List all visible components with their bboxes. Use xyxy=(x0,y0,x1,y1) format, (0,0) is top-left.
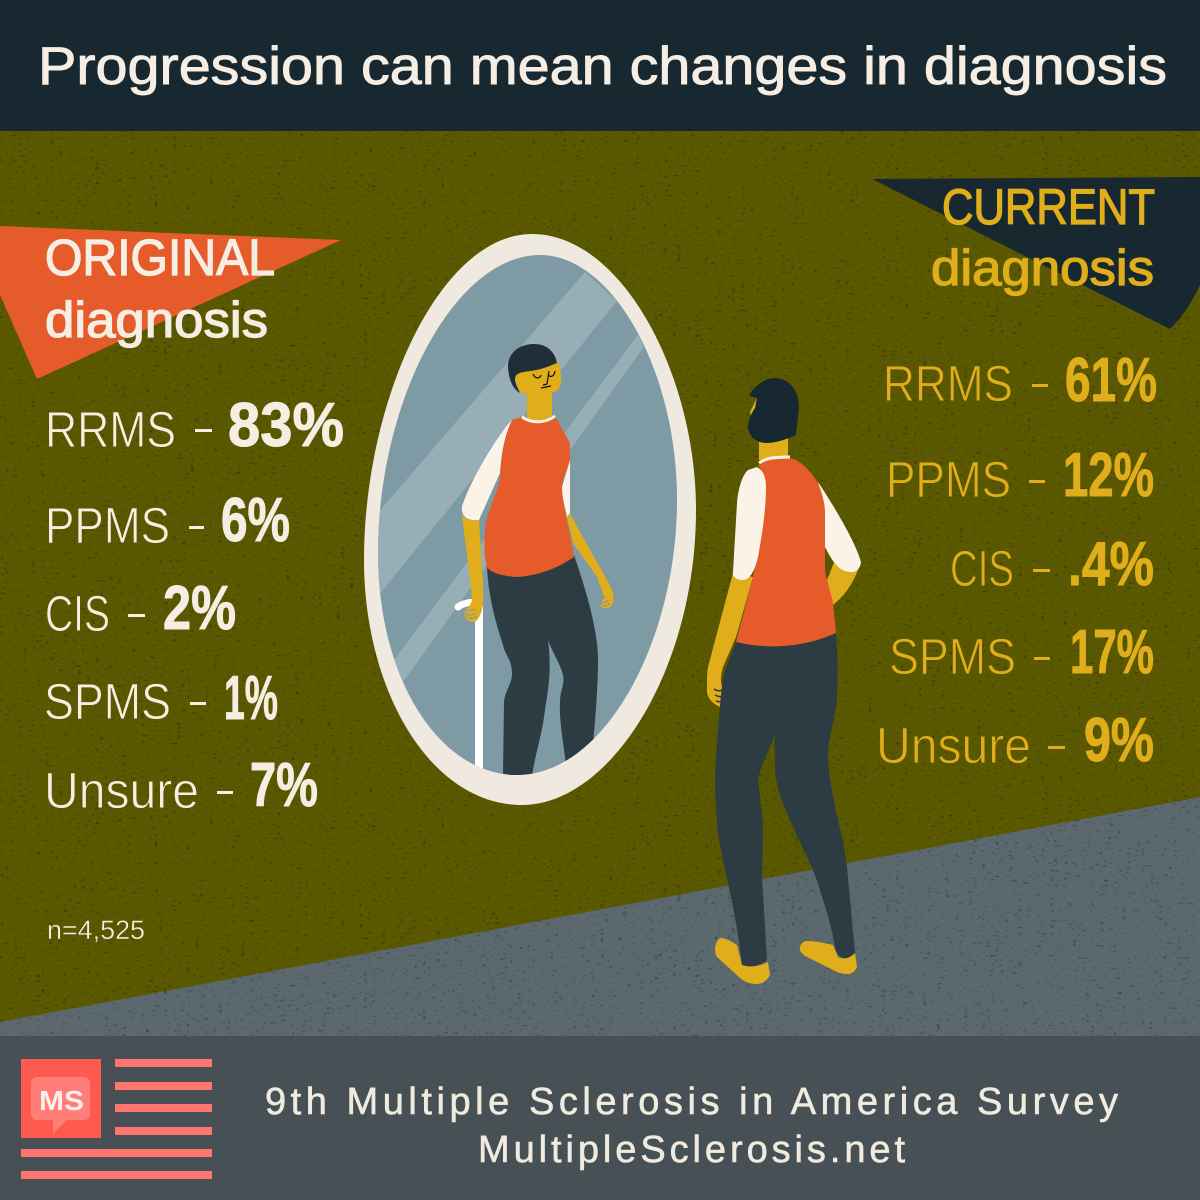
row: SPMS 17%: SPMS xyxy=(889,628,1016,685)
reflection neck xyxy=(527,392,552,420)
row: PPMS 6%: 6% xyxy=(221,486,290,555)
logo square xyxy=(21,1059,101,1138)
reflection left hand fingers xyxy=(465,609,477,619)
hand fingers xyxy=(714,687,731,702)
row: PPMS 12%: PPMS xyxy=(886,451,1011,508)
list: original diagnosis percentages xyxy=(44,391,344,820)
footer bar xyxy=(0,1036,1200,1200)
website: MultipleSclerosis.net xyxy=(478,1129,905,1171)
sample size note: n=4,525 xyxy=(47,915,145,945)
row: Unsure 9%: 9% xyxy=(1084,706,1154,775)
row: Unsure 9% xyxy=(876,706,1154,775)
row: CIS 2%: CIS xyxy=(45,585,110,642)
right arm xyxy=(827,560,858,605)
reflection vest xyxy=(484,416,574,577)
row: PPMS 6% xyxy=(45,486,290,555)
reflection collar xyxy=(522,416,555,422)
heading: original diagnosis xyxy=(45,229,275,348)
row: SPMS 1%: SPMS xyxy=(44,673,171,730)
mirror glass xyxy=(378,255,677,775)
row: RRMS 61%: 61% xyxy=(1065,346,1157,415)
vest xyxy=(736,458,836,646)
heading: current diagnosis xyxy=(931,179,1155,296)
row: Unsure 7%: 7% xyxy=(250,751,318,820)
survey name: 9th Multiple Sclerosis in America Survey xyxy=(265,1081,1118,1123)
logo speech bubble xyxy=(31,1077,90,1133)
title: Progression can mean changes in diagnosis xyxy=(38,37,1167,96)
row: CIS .4%: CIS xyxy=(950,540,1014,597)
floor xyxy=(0,797,1200,1036)
title bar xyxy=(0,0,1200,131)
row: SPMS 1% xyxy=(44,664,278,733)
reflection hair xyxy=(508,344,557,393)
reflection right arm xyxy=(567,513,614,608)
row: Unsure 7% xyxy=(44,751,318,820)
logo text: MS xyxy=(39,1085,84,1116)
row: CIS .4% xyxy=(950,530,1154,599)
wall background xyxy=(0,131,1200,1036)
row: PPMS 12% xyxy=(886,441,1154,510)
reflection facial features xyxy=(533,371,555,388)
reflection: woman with cane xyxy=(458,344,614,776)
row: PPMS 12%: 12% xyxy=(1063,441,1154,510)
row: RRMS 83% xyxy=(45,391,344,460)
logo: MS flag xyxy=(21,1059,212,1179)
reflection left arm xyxy=(462,515,483,622)
reflection trousers xyxy=(487,555,598,776)
reflection right hand fingers xyxy=(600,596,610,606)
mirror xyxy=(364,234,696,805)
row: SPMS 1%: 1% xyxy=(224,664,278,733)
mirror glare xyxy=(370,272,644,700)
row: RRMS 83%: RRMS xyxy=(45,401,176,458)
reflection left sleeve xyxy=(462,420,512,520)
flag stripes xyxy=(21,1059,212,1179)
heading: current diagnosis: diagnosis xyxy=(931,240,1154,296)
left shoe xyxy=(715,938,770,984)
man looking into mirror xyxy=(707,378,861,984)
row: Unsure 9%: Unsure xyxy=(876,717,1031,774)
row: RRMS 83%: 83% xyxy=(228,391,344,460)
row: RRMS 61%: RRMS xyxy=(883,355,1013,412)
face sliver xyxy=(750,398,757,420)
reflection right sleeve xyxy=(562,460,570,517)
row: RRMS 61% xyxy=(883,346,1157,415)
heading: current diagnosis: CURRENT xyxy=(942,179,1155,235)
right shoe xyxy=(800,941,857,974)
heading: original diagnosis: ORIGINAL xyxy=(45,229,275,286)
cane xyxy=(458,602,483,776)
collar xyxy=(759,457,790,463)
hair xyxy=(748,378,799,443)
left sleeve xyxy=(733,467,766,580)
row: CIS 2% xyxy=(45,574,236,643)
row: SPMS 17%: 17% xyxy=(1070,618,1154,687)
right sleeve xyxy=(818,482,861,572)
row: PPMS 6%: PPMS xyxy=(45,497,170,554)
reflection face xyxy=(515,358,561,395)
banner: original diagnosis xyxy=(0,226,341,379)
row: Unsure 7%: Unsure xyxy=(44,762,199,819)
trousers xyxy=(715,633,855,966)
mirror frame xyxy=(364,234,696,805)
banner: current diagnosis xyxy=(872,177,1200,329)
list: current diagnosis percentages xyxy=(876,346,1157,775)
left arm xyxy=(707,573,753,707)
heading: original diagnosis: diagnosis xyxy=(45,292,268,348)
row: CIS .4%: .4% xyxy=(1068,530,1154,599)
row: CIS 2%: 2% xyxy=(163,574,236,643)
row: SPMS 17% xyxy=(889,618,1154,687)
neck xyxy=(759,436,788,460)
